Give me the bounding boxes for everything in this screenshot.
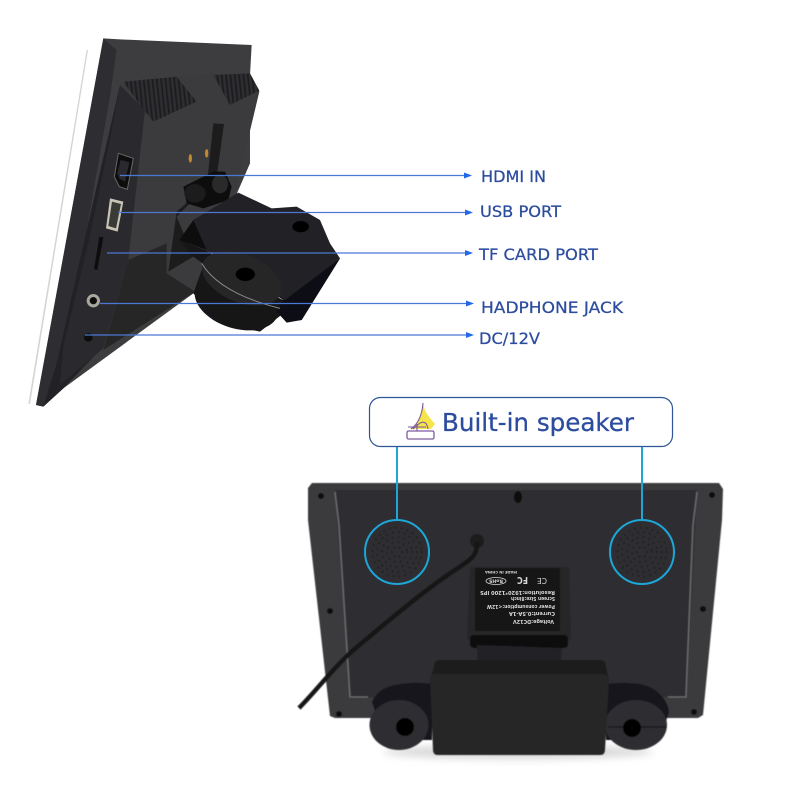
icon: HDMI port — [114, 153, 133, 189]
mount cylinder — [187, 263, 286, 340]
mount block — [179, 193, 340, 323]
rating plate text: Screen Size:8inch — [511, 595, 555, 601]
rating plate text: RoHS — [489, 578, 503, 584]
mount block — [430, 660, 609, 755]
photo: tablet side view with mount — [28, 38, 340, 407]
icon: heat vents — [123, 73, 259, 122]
right speaker grille — [618, 528, 666, 576]
icon: TF card slot — [94, 237, 103, 270]
rating plate text: Voltage:DC12V — [513, 618, 554, 624]
mount disc — [194, 240, 289, 316]
photo: tablet back view — [299, 483, 723, 759]
rating plate text: MADE IN CHINA — [485, 570, 517, 574]
rating plate text: Current:0.5A-1A — [509, 610, 555, 616]
port labels — [478, 167, 624, 348]
port labels: TF CARD PORT — [478, 245, 598, 264]
port labels: DC/12V — [479, 329, 540, 348]
rating plate — [467, 567, 571, 640]
rating plate text: Power consumption:<12W — [487, 603, 555, 609]
ground shadow — [383, 745, 653, 759]
hinge — [470, 635, 568, 668]
corner screws — [318, 492, 715, 717]
rating plate text — [480, 570, 555, 624]
icon: headphone jack — [87, 294, 100, 307]
callout: built-in speaker — [370, 398, 672, 446]
icon: gramophone — [407, 403, 435, 439]
mount hinge — [183, 172, 232, 208]
rating plate text: Resolution:1920*1200 IPS — [480, 589, 555, 595]
rating plate text: FC — [517, 574, 528, 585]
back panel — [308, 483, 723, 718]
port labels: HADPHONE JACK — [481, 298, 624, 317]
callout lines and arrows: ports — [85, 172, 474, 338]
left speaker grille — [372, 528, 422, 576]
power cable — [299, 534, 484, 708]
icon: DC jack — [84, 333, 93, 342]
icon: USB port — [106, 198, 123, 232]
port labels: USB PORT — [480, 202, 561, 221]
callout: built-in speaker: Built-in speaker — [442, 408, 635, 437]
mount discs — [370, 683, 669, 750]
right speaker highlight ring and connector — [610, 447, 674, 584]
port labels: HDMI IN — [481, 167, 546, 186]
left speaker highlight ring and connector — [365, 447, 429, 584]
rating plate text: CE — [537, 576, 547, 585]
